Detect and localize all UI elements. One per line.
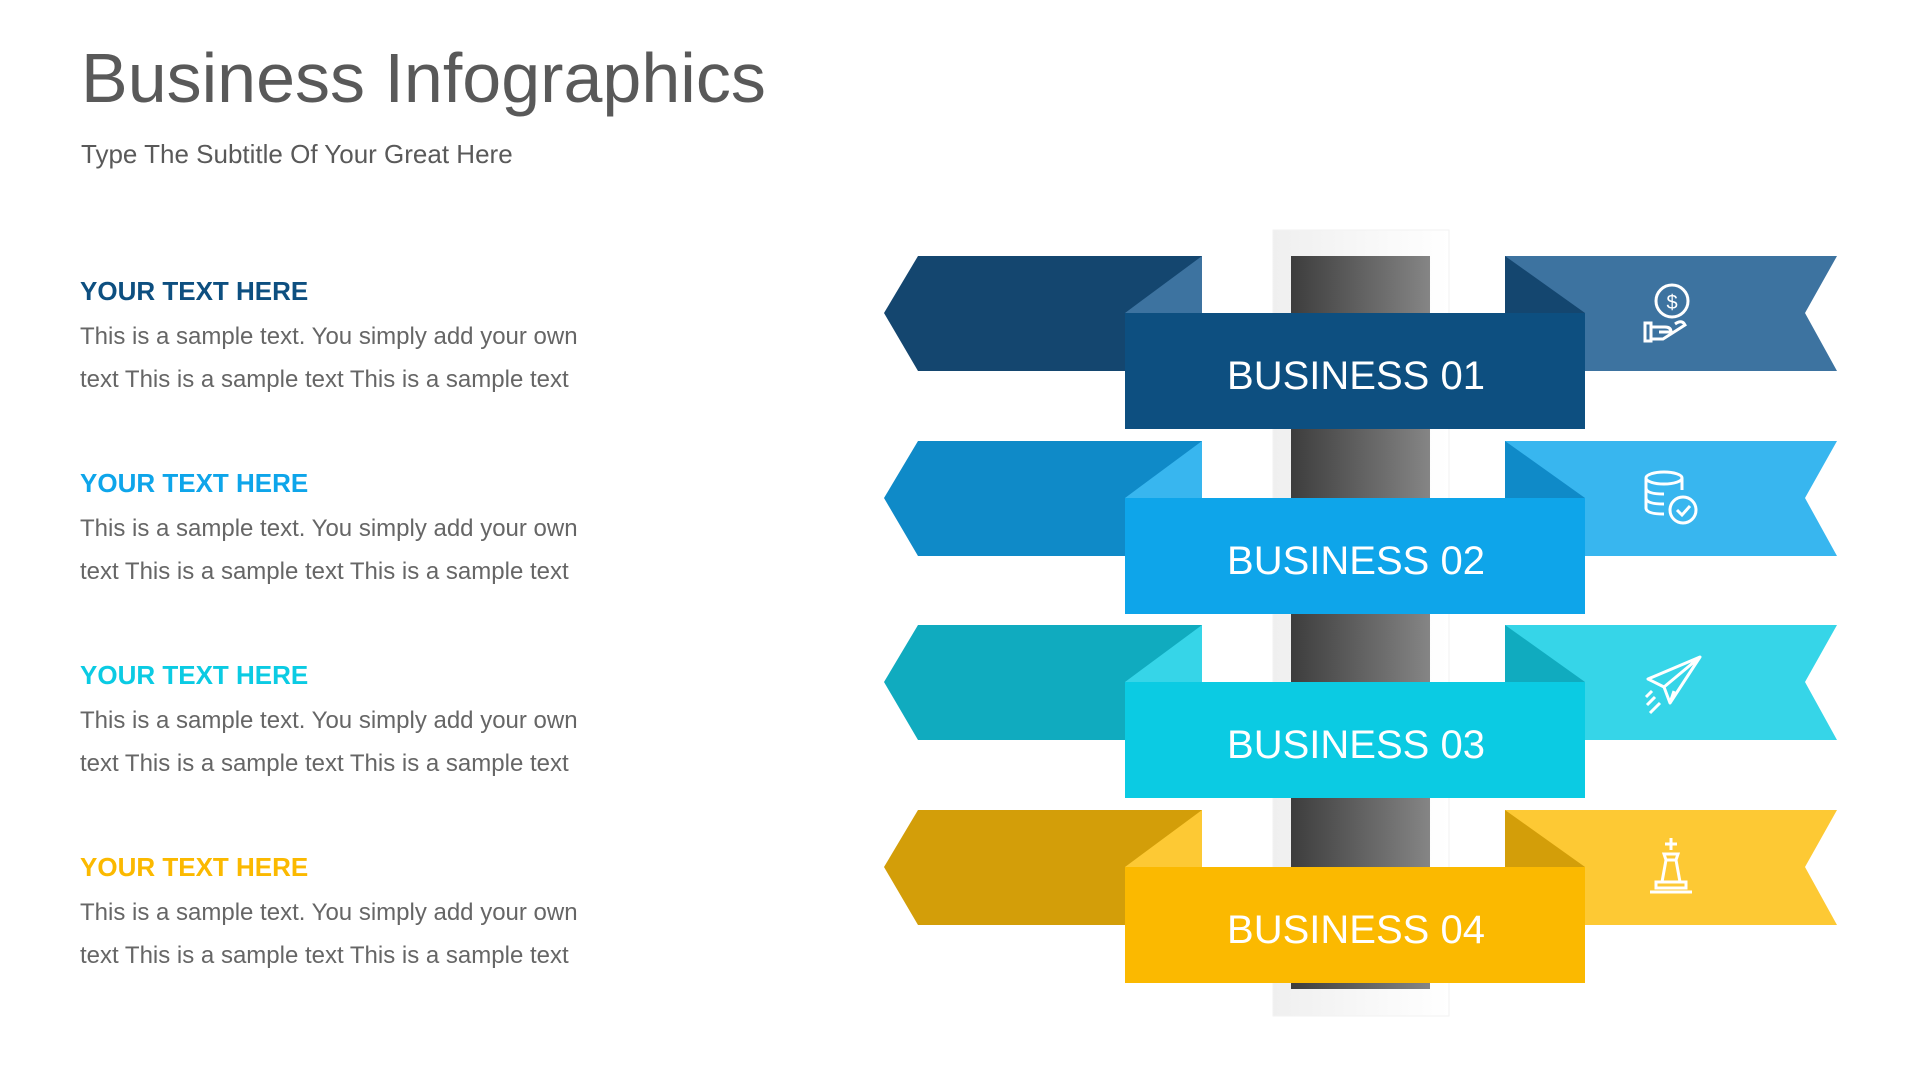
text block 1 xyxy=(80,276,578,393)
row 2 xyxy=(884,441,1837,614)
icon: money hand: $ xyxy=(1666,292,1678,314)
text block 3: YOUR TEXT HERE xyxy=(80,660,308,690)
text block 1: YOUR TEXT HERE xyxy=(80,276,308,306)
row 4 xyxy=(884,810,1837,983)
text block 1: This is a sample text. You simply add your own text This is a sample text This is a sample text xyxy=(80,323,578,393)
icon: paper plane xyxy=(1646,657,1700,713)
row 1 xyxy=(884,256,1837,429)
text block 4: This is a sample text. You simply add your own text This is a sample text This is a sample text xyxy=(80,899,578,969)
row 1: BUSINESS 01 xyxy=(1227,354,1485,398)
row 3 xyxy=(884,625,1837,798)
text block 2: YOUR TEXT HERE xyxy=(80,468,308,498)
row 4: BUSINESS 04 xyxy=(1227,908,1485,952)
icon: money hand xyxy=(1645,285,1688,341)
text block 3 xyxy=(80,660,578,777)
text block 4 xyxy=(80,852,578,969)
text block 2: This is a sample text. You simply add your own text This is a sample text This is a sample text xyxy=(80,515,578,585)
row 2: BUSINESS 02 xyxy=(1227,539,1485,583)
text block 2 xyxy=(80,468,578,585)
icon: chess king xyxy=(1650,838,1692,892)
text block 3: This is a sample text. You simply add your own text This is a sample text This is a sample text xyxy=(80,707,578,777)
row 3: BUSINESS 03 xyxy=(1227,723,1485,767)
text block 4: YOUR TEXT HERE xyxy=(80,852,308,882)
pole xyxy=(1273,230,1449,1016)
subtitle: Type The Subtitle Of Your Great Here xyxy=(81,139,513,169)
title: Business Infographics xyxy=(81,39,766,117)
icon: database check xyxy=(1646,472,1696,523)
